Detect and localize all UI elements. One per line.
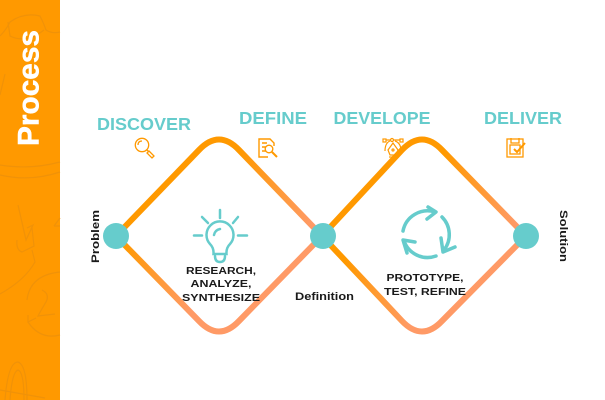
heading: develope: DEVELOPE [334, 108, 430, 128]
title: Process [12, 30, 46, 146]
text: research analyze synthesize: ANALYZE, [190, 278, 252, 290]
label: problem: Problem [90, 210, 102, 263]
node: problem [103, 223, 129, 249]
heading: define: DEFINE [239, 108, 307, 128]
text: research analyze synthesize: SYNTHESIZE [182, 292, 260, 304]
node: definition [310, 223, 336, 249]
node: solution [513, 223, 539, 249]
label: definition: Definition [295, 291, 354, 303]
text: prototype test refine [384, 272, 466, 298]
icon: magnifier [135, 138, 154, 158]
icon: cycle arrows [403, 207, 455, 257]
icon: document search [259, 139, 277, 157]
text: prototype test refine: TEST, REFINE [384, 286, 466, 298]
heading: deliver: DELIVER [484, 108, 562, 128]
icon: checklist clipboard [507, 138, 525, 157]
heading: discover: DISCOVER [97, 114, 191, 134]
decorative doodles [0, 15, 60, 400]
text: research analyze synthesize: RESEARCH, [186, 265, 256, 277]
text: research analyze synthesize [182, 265, 260, 304]
label: solution: Solution [557, 210, 569, 262]
text: prototype test refine: PROTOTYPE, [386, 272, 464, 284]
diagram: infinity diamond loop [116, 140, 526, 332]
icon: light bulb [194, 210, 247, 262]
side panel [0, 0, 60, 400]
icon: vector pen [383, 138, 403, 157]
